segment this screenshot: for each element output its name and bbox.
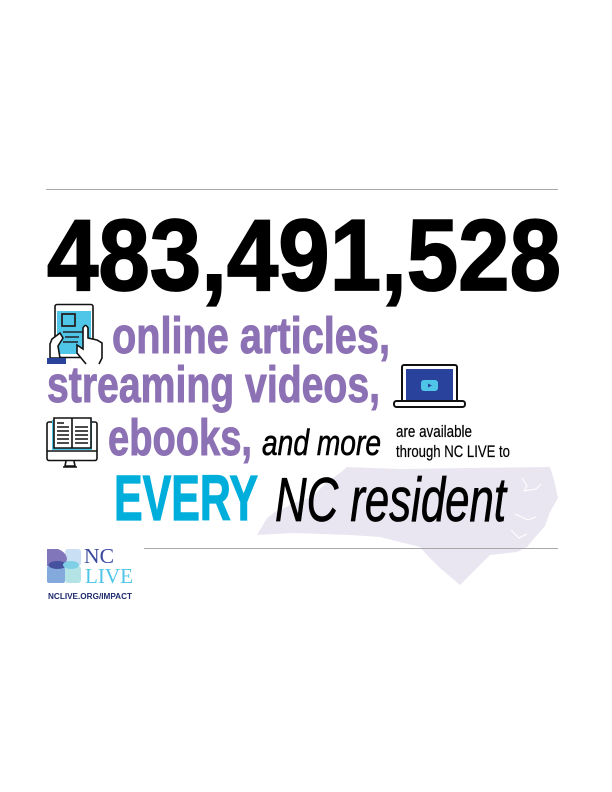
big number: 483,491,528 (47, 200, 561, 312)
text: are available through NC LIVE to: are available (396, 422, 472, 441)
logo: NC LIVE (47, 544, 133, 588)
text: are available through NC LIVE to: through NC LIVE to (396, 442, 510, 461)
logo mark (47, 549, 81, 583)
text: streaming videos: streaming videos, (47, 356, 380, 413)
logo wordmark: LIVE (85, 564, 133, 588)
logo wordmark: NC (84, 544, 114, 568)
text: and more: and more (262, 422, 381, 463)
icon: tablet with hand (47, 304, 102, 364)
logo wordmark (84, 544, 133, 588)
icon: laptop with video (394, 365, 465, 407)
map: North Carolina silhouette (257, 467, 558, 585)
text: EVERY: EVERY (114, 462, 258, 534)
text: NC resident: NC resident (275, 466, 508, 535)
text: ebooks: ebooks, (108, 409, 252, 466)
text: online articles: online articles, (112, 307, 390, 364)
icon: ebook on monitor (47, 418, 97, 467)
text: website url: NCLIVE.ORG/IMPACT (48, 592, 132, 601)
text: are available through NC LIVE to (396, 422, 510, 461)
